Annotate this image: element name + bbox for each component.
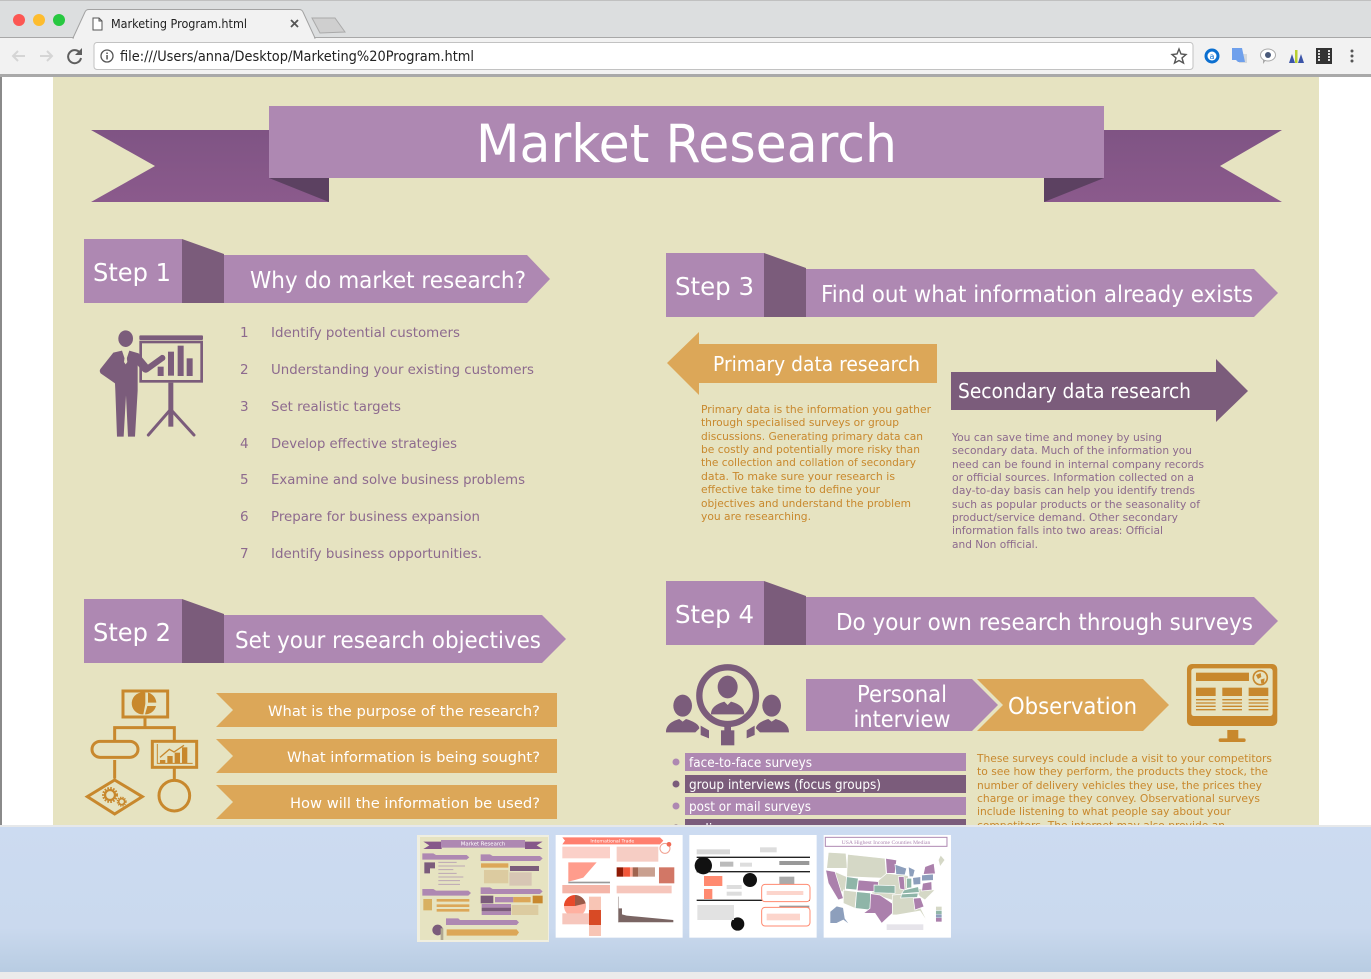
- primary data text: through specialised surveys or group: [701, 416, 899, 429]
- secondary data text: or official sources. Information collected on a: [952, 471, 1194, 484]
- reasons list: 6: [240, 509, 249, 525]
- address bar: file:///Users/anna/Desktop/Marketing%20Program.html: [120, 49, 474, 65]
- extension icons: a: [1210, 52, 1215, 61]
- primary data text: Primary data is the information you gather: [701, 403, 931, 416]
- step 1 header: Step 1: [93, 258, 171, 287]
- window controls: [13, 14, 65, 26]
- reasons list: Set realistic targets: [271, 399, 401, 415]
- primary data research arrow: Primary data research: [713, 352, 920, 376]
- personal interview chevron: [806, 679, 998, 733]
- step 3 header: Find out what information already exists: [821, 282, 1253, 308]
- reasons list: 5: [240, 472, 249, 488]
- objective chevrons: [216, 693, 557, 819]
- reasons list: Understanding your existing customers: [271, 362, 534, 378]
- observation text: to see how they perform, the products they stock, the: [977, 765, 1268, 778]
- thumbnail: international trade: International Trade: [590, 838, 634, 844]
- browser chrome: [0, 0, 1371, 77]
- observation text: These surveys could include a visit to your competitors: [976, 752, 1272, 765]
- primary data text: discussions. Generating primary data can: [701, 430, 923, 443]
- thumbnail: USA map: USA Highest Income Counties Median: [842, 840, 930, 846]
- primary data text: the collection and collation of secondary: [701, 456, 916, 469]
- secondary data text: day-to-day basis can help you identify trends: [952, 484, 1195, 497]
- title banner: [91, 106, 1282, 202]
- step 4 header: [666, 581, 1278, 645]
- icon: web page monitor: [1187, 664, 1277, 742]
- thumbnail strip: [0, 825, 1371, 979]
- observation text: number of delivery vehicles they use, the prices they: [977, 779, 1262, 792]
- step 4 header: Do your own research through surveys: [836, 610, 1253, 636]
- secondary data text: secondary data. Much of the information you: [952, 444, 1192, 457]
- observation text: competitors. The internet may also provide an: [977, 819, 1225, 832]
- icon: presenter with chart board: [100, 330, 203, 437]
- observation chevron: Observation: [1008, 694, 1137, 720]
- personal interview chevron: Personal: [857, 682, 947, 708]
- objective chevrons: How will the information be used?: [290, 796, 540, 812]
- step 2 header: Set your research objectives: [235, 628, 541, 654]
- reasons list: 4: [240, 436, 249, 452]
- step 1 header: [84, 239, 550, 303]
- secondary data text: product/service demand. Other secondary: [952, 511, 1178, 524]
- secondary data text: You can save time and money by using: [951, 431, 1162, 444]
- reasons list: 3: [240, 399, 249, 415]
- icon: flowchart: [87, 691, 197, 814]
- reasons list: 1: [240, 325, 249, 341]
- reasons list: Identify potential customers: [271, 325, 460, 341]
- step 2 header: [84, 599, 566, 663]
- secondary data text: need can be found in internal company records: [952, 458, 1204, 471]
- primary data text: data. To make sure your research is: [701, 470, 895, 483]
- observation chevron: [977, 679, 1169, 731]
- objective chevrons: What information is being sought?: [287, 750, 540, 766]
- reasons list: 2: [240, 362, 249, 378]
- observation text: [976, 752, 1272, 832]
- thumbnail: USA map: [824, 835, 951, 938]
- thumbnail: market research: Market Research: [461, 842, 505, 848]
- reasons list: 7: [240, 546, 249, 562]
- page background panel: [53, 77, 1319, 827]
- thumbnail: international trade: [556, 835, 683, 938]
- secondary data research arrow: Secondary data research: [958, 379, 1191, 403]
- thumbnail: survey chart: [689, 835, 817, 938]
- thumbnail: market research: [417, 835, 549, 942]
- primary data text: be costly and potentially more risky than: [701, 443, 920, 456]
- survey type list: post or mail surveys: [689, 800, 811, 815]
- step 3 header: Step 3: [675, 272, 754, 301]
- step 4 header: Step 4: [675, 600, 754, 629]
- address bar: [94, 42, 1193, 70]
- reasons list: Develop effective strategies: [271, 436, 457, 452]
- survey type list: group interviews (focus groups): [689, 778, 881, 793]
- personal interview chevron: interview: [854, 707, 950, 733]
- step 3 header: [666, 253, 1278, 317]
- observation text: charge or image they convey. Observational surveys: [977, 792, 1260, 805]
- survey type list: online surveys: [689, 822, 784, 837]
- reasons list: [240, 325, 534, 562]
- step 2 header: Step 2: [93, 618, 171, 647]
- reasons list: Identify business opportunities.: [271, 546, 482, 562]
- secondary data text: [951, 431, 1204, 551]
- primary data text: objectives and understand the problem: [701, 497, 911, 510]
- step 1 header: Why do market research?: [250, 268, 526, 294]
- navigation buttons: [13, 48, 82, 63]
- secondary data research arrow: [951, 359, 1248, 422]
- survey type list: face-to-face surveys: [689, 756, 812, 771]
- objective chevrons: What is the purpose of the research?: [268, 704, 540, 720]
- browser tab: Marketing Program.html: [111, 17, 247, 31]
- secondary data text: such as popular products or the seasonality of: [952, 498, 1201, 511]
- secondary data text: information falls into two areas: Official: [952, 524, 1163, 537]
- browser tab: [73, 10, 345, 39]
- reasons list: Prepare for business expansion: [271, 509, 480, 525]
- title banner: Market Research: [476, 114, 897, 175]
- primary data text: [701, 403, 931, 523]
- primary data text: effective take time to define your: [701, 483, 880, 496]
- reasons list: Examine and solve business problems: [271, 472, 525, 488]
- survey type list: [672, 753, 966, 837]
- secondary data text: and Non official.: [952, 538, 1038, 551]
- observation text: include listening to what people say about your: [977, 805, 1231, 818]
- primary data research arrow: [667, 332, 937, 395]
- primary data text: you are researching.: [701, 510, 811, 523]
- extension icons: [1204, 48, 1354, 64]
- icon: people under magnifier: [666, 667, 789, 745]
